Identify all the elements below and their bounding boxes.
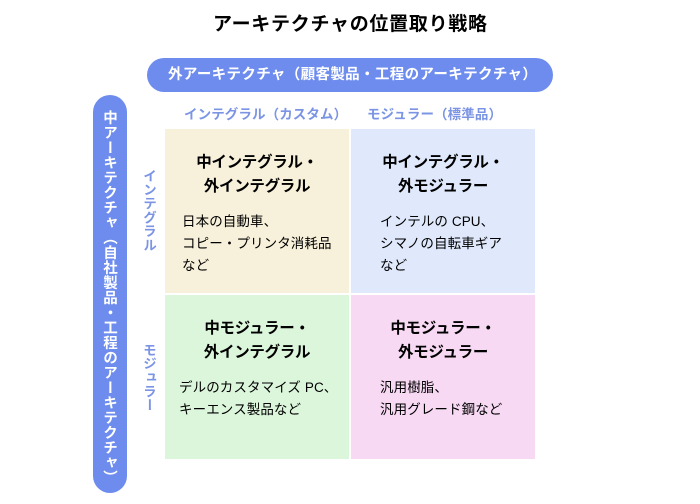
panel heading: 外モジュラー <box>398 344 488 361</box>
panel: inner integral, outer integral <box>165 129 349 293</box>
panel heading <box>204 320 310 361</box>
panel examples: コピー・プリンタ消耗品 <box>182 236 332 251</box>
column label: integral: インテグラル（カスタム） <box>184 107 347 122</box>
title: アーキテクチャの位置取り戦略 <box>213 14 488 35</box>
panel examples: キーエンス製品など <box>179 402 301 417</box>
panel examples: など <box>380 258 407 273</box>
panel examples: 日本の自動車、 <box>182 214 277 229</box>
panel heading: 中インテグラル・ <box>196 154 318 171</box>
column label: modular: モジュラー（標準品） <box>367 107 502 122</box>
panel examples <box>179 380 337 417</box>
panel: inner modular, outer modular <box>351 295 535 459</box>
panel examples: インテルの CPU、 <box>380 214 494 229</box>
panel heading: 中モジュラー・ <box>204 320 310 337</box>
panel examples: シマノの自転車ギア <box>380 236 502 251</box>
panel examples: など <box>182 258 209 273</box>
top pill: outer architecture: 外アーキテクチャ（顧客製品・工程のアーキテクチャ） <box>168 67 537 83</box>
left pill: inner architecture: 中アーキテクチャ（自社製品・工程のアーキテクチャ） <box>101 110 117 485</box>
row label: modular: モジュラー <box>141 343 156 412</box>
panel heading: 外モジュラー <box>398 178 488 195</box>
panel examples: 汎用樹脂、 <box>380 380 448 395</box>
panel heading: 外インテグラル <box>204 178 310 195</box>
left pill: inner architecture <box>93 95 127 493</box>
panel examples: 汎用グレード鋼など <box>380 402 502 417</box>
panel: inner integral, outer modular <box>351 129 535 293</box>
panel examples <box>380 214 502 273</box>
panel examples: デルのカスタマイズ PC、 <box>179 380 337 395</box>
panel heading: 外インテグラル <box>204 344 310 361</box>
row label: integral: インテグラル <box>141 169 156 252</box>
panel heading: 中モジュラー・ <box>390 320 496 337</box>
panel heading <box>382 154 504 195</box>
panel examples <box>380 380 502 417</box>
panel heading <box>196 154 318 195</box>
panel: inner modular, outer integral <box>165 295 349 459</box>
panel heading: 中インテグラル・ <box>382 154 504 171</box>
panel examples <box>182 214 332 273</box>
top pill: outer architecture <box>147 58 553 92</box>
panel heading <box>390 320 496 361</box>
